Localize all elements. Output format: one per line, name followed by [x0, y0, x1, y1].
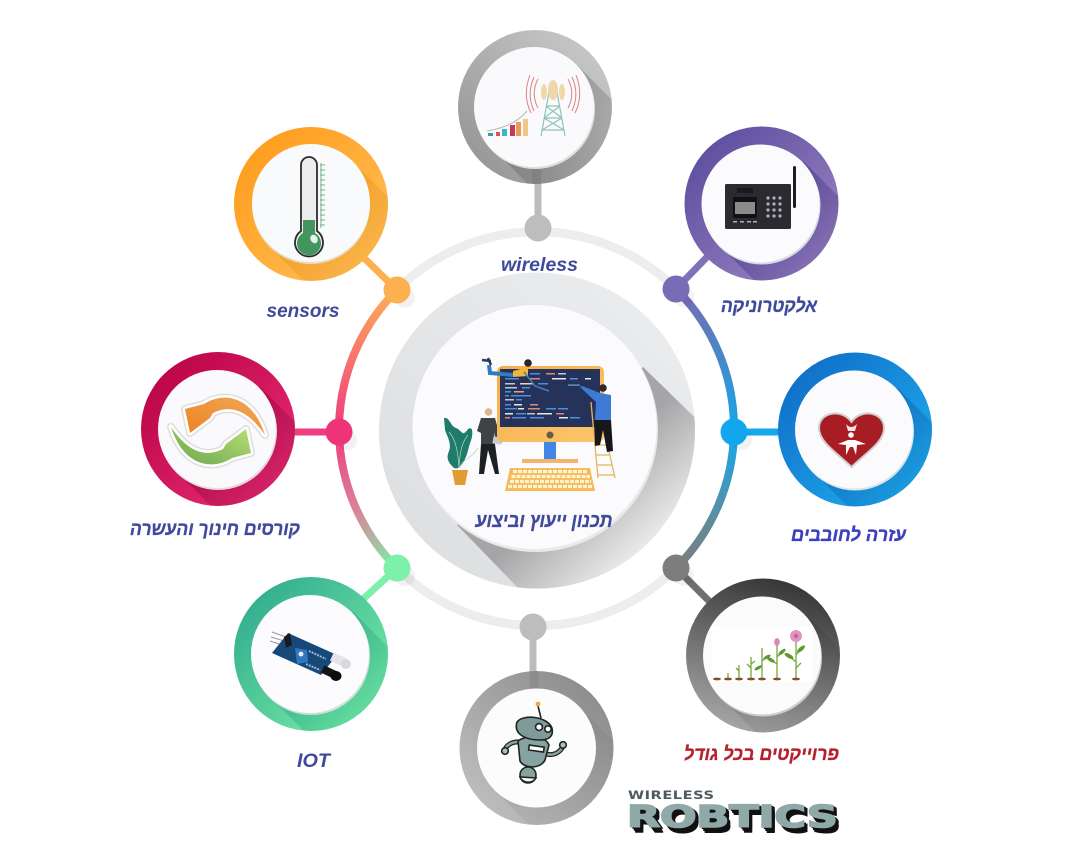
- label: wireless: wireless: [501, 255, 578, 276]
- central ring: blue to gray arc: [676, 432, 734, 568]
- plant: [444, 418, 478, 485]
- ring: sensors: [234, 127, 388, 281]
- ring: IOT: [234, 577, 388, 731]
- icon: signal bars and tower: [487, 75, 580, 136]
- ring: courses: [141, 352, 295, 506]
- illustration: programmers at a computer: [444, 358, 615, 491]
- monitor: [497, 366, 604, 463]
- logo: Wireless Robotics wordmark: WIRELESS: [628, 788, 714, 802]
- connector: robot: [530, 627, 536, 675]
- label: electronics: אלקטרוניקה: [721, 296, 818, 317]
- infographic diagram: [130, 30, 932, 825]
- man on the ladder: [568, 384, 613, 452]
- standing man: [477, 408, 502, 474]
- node shadows: [339, 289, 742, 576]
- node: robot: [520, 614, 546, 640]
- hub label: תכנון ייעוץ וביצוע: [475, 510, 612, 532]
- icon: circular arrows: [171, 398, 265, 464]
- label: courses: קורסים חינוך והעשרה: [130, 519, 301, 540]
- hub white circle: [412, 305, 658, 552]
- label: projects: פרוייקטים בכל גודל: [684, 744, 839, 765]
- central ring: purple to blue arc: [676, 289, 734, 432]
- connector: sensors: [362, 256, 397, 290]
- icon: IR sensor board: [270, 632, 351, 681]
- connector: electronics: [676, 256, 708, 289]
- connector: projects: [676, 568, 712, 604]
- ring: wireless: [458, 30, 612, 184]
- icon: heart: [819, 413, 884, 467]
- node: projects: [662, 554, 690, 582]
- central ring: orange to pink arc: [339, 290, 397, 432]
- logo: Wireless Robotics wordmark: ROBTICS: [627, 800, 838, 835]
- connector: IOT: [362, 568, 397, 600]
- node: electronics: [662, 276, 690, 302]
- node: IOT: [384, 554, 410, 582]
- label: IOT: IOT: [297, 751, 331, 772]
- connector: hobbyists: [734, 428, 782, 436]
- woman lying on the monitor: [482, 358, 549, 391]
- label: sensors: sensors: [266, 301, 340, 322]
- ring: electronics: [684, 126, 838, 280]
- node: courses: [326, 418, 352, 446]
- ring: projects: [686, 578, 840, 732]
- label: hobbyists: עזרה לחובבים: [791, 525, 907, 546]
- connector: courses: [290, 428, 339, 436]
- central ring: bottom light arc: [397, 568, 676, 626]
- central hub: [379, 272, 695, 588]
- node: wireless: [524, 214, 552, 242]
- orange arrow: [185, 398, 265, 435]
- ladder: [591, 402, 615, 478]
- icon: growing plants: [712, 627, 812, 682]
- node: sensors: [384, 276, 410, 304]
- hub long shadow: [457, 367, 695, 588]
- ring: hobbyists: [778, 352, 932, 506]
- central ring: pink to green arc: [339, 432, 397, 568]
- node: hobbyists: [720, 418, 748, 446]
- keyboard: [505, 468, 595, 491]
- icon: alarm panel: [725, 166, 796, 229]
- hub gray disc: [379, 272, 695, 588]
- central ring: top light arc: [397, 232, 676, 290]
- green arrow: [171, 427, 251, 464]
- icon: thermometer: [295, 157, 325, 256]
- icon: robot: [502, 702, 566, 783]
- ring: robot: [460, 671, 614, 825]
- code lines: [505, 373, 591, 418]
- connector: wireless: [534, 180, 542, 228]
